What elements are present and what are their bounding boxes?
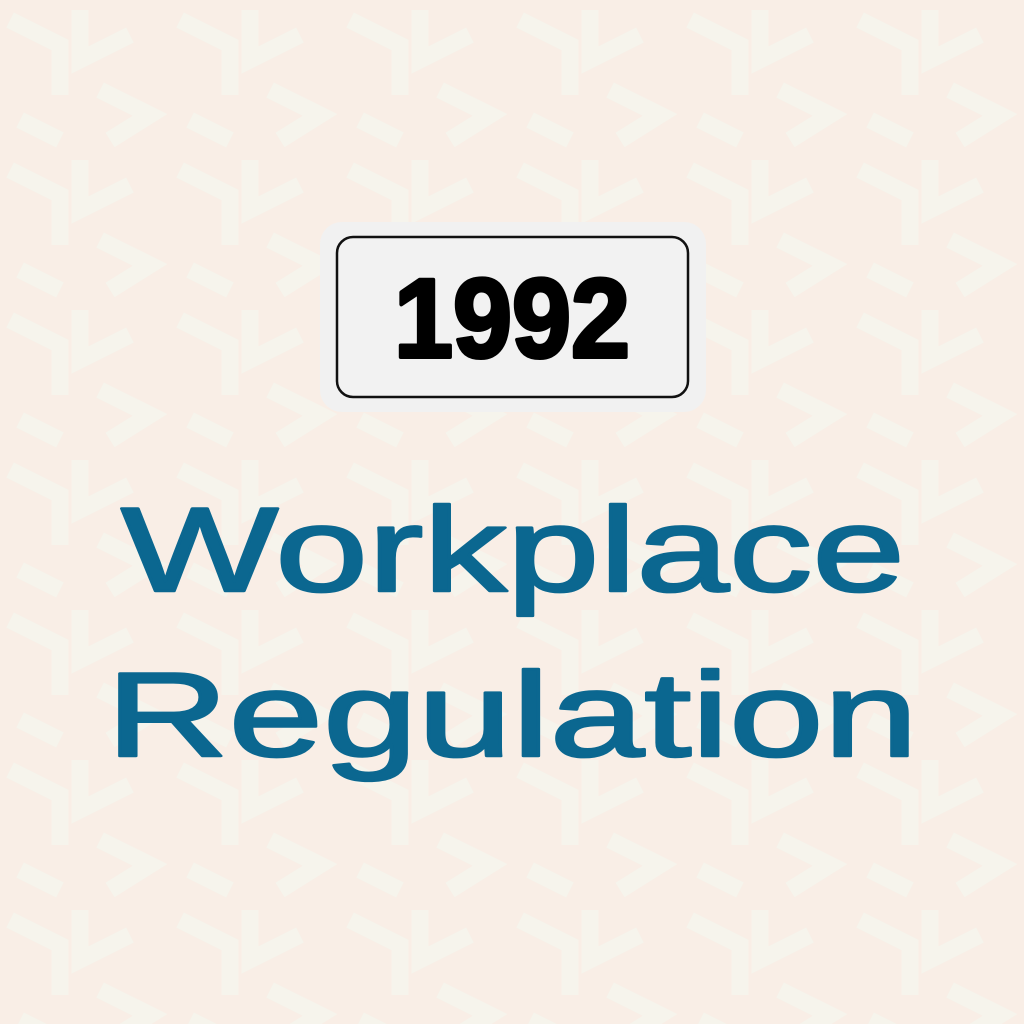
- year badge: [320, 222, 706, 412]
- title: [106, 483, 918, 782]
- title: Regulation: [106, 648, 918, 782]
- year badge: 1992: [394, 256, 630, 381]
- title: Workplace: [121, 483, 905, 617]
